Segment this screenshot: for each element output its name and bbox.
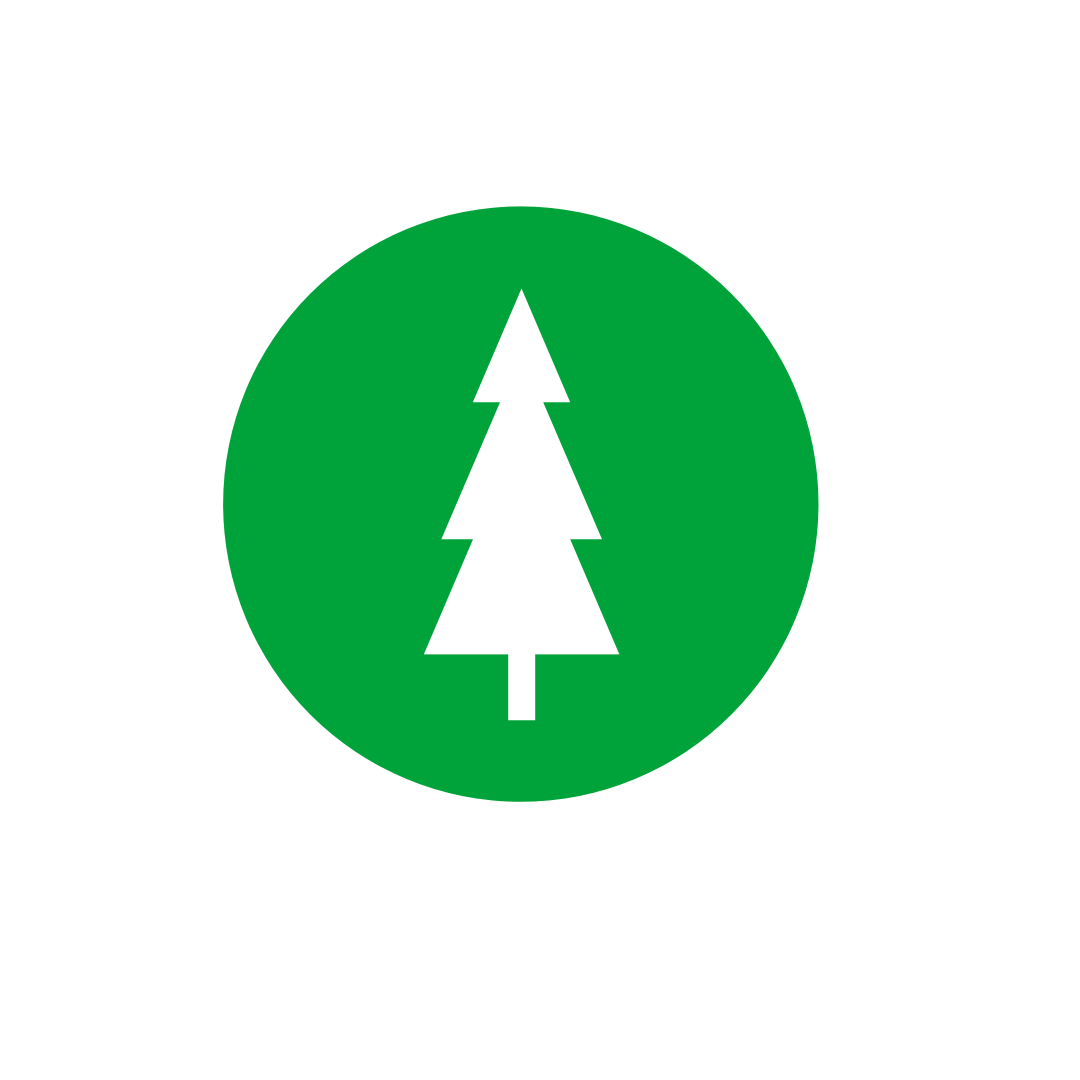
green circle [223, 206, 818, 802]
white pine tree [424, 288, 619, 720]
